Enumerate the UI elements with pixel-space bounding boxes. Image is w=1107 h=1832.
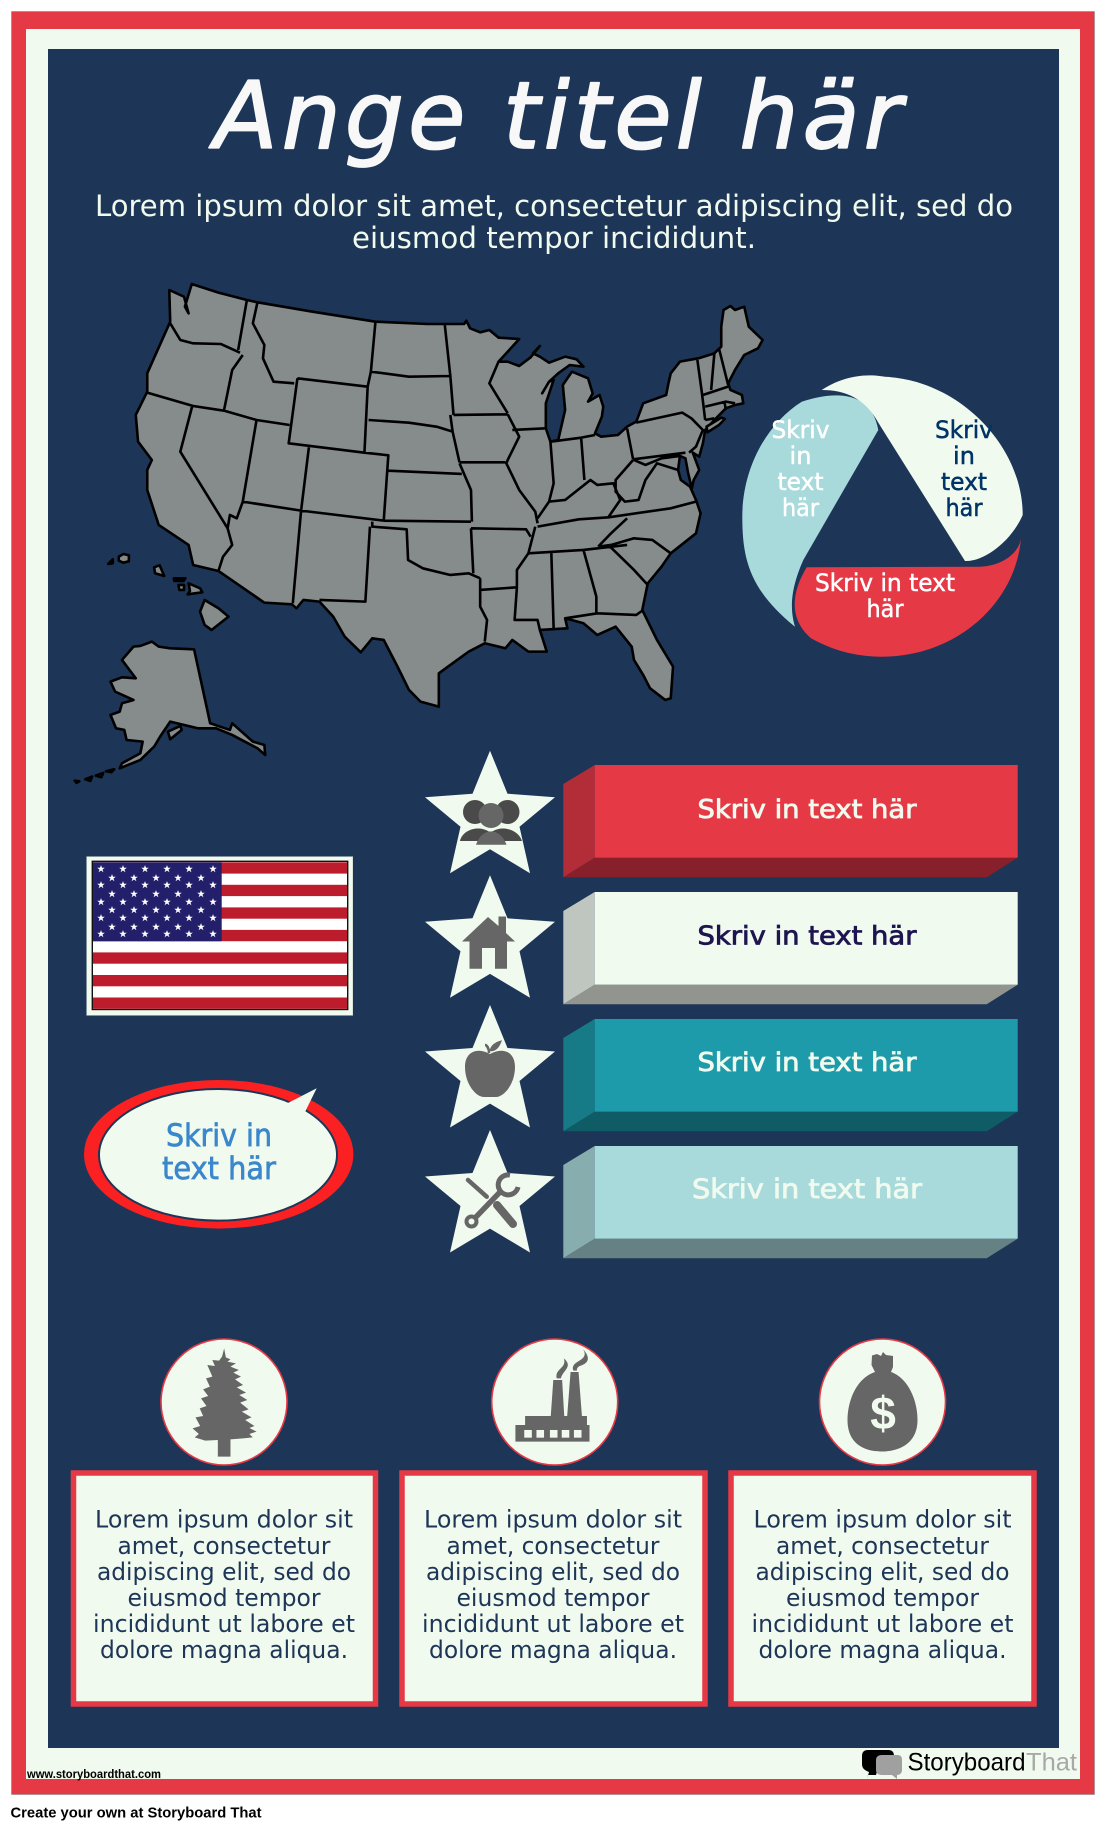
text box 1: adipiscing elit, sed do	[97, 1558, 351, 1586]
pie segment: red	[795, 539, 1021, 657]
pie label: aqua: här	[782, 494, 819, 522]
circle icon: money bag: $	[870, 1387, 896, 1439]
text box 1: amet, consectetur	[118, 1532, 331, 1560]
text box 1: incididunt ut labore et	[93, 1610, 355, 1638]
speech bubble	[84, 1080, 353, 1229]
pie label: red: Skriv in text	[815, 569, 955, 597]
bubble text: text här	[162, 1151, 276, 1187]
pie label: aqua: in	[790, 442, 811, 470]
subtitle	[95, 189, 1013, 255]
pie label: light	[935, 416, 993, 522]
bar 3: teal	[563, 1019, 1018, 1131]
map: Long Island	[707, 418, 725, 432]
text box 3: dolore magna aliqua.	[758, 1636, 1006, 1664]
text box 1: Lorem ipsum dolor sit	[95, 1506, 353, 1534]
subtitle: Lorem ipsum dolor sit amet, consectetur adipiscing elit, sed do	[95, 189, 1013, 223]
text box 2: dolore magna aliqua.	[429, 1636, 677, 1664]
bubble text: Skriv in	[166, 1118, 272, 1154]
storyboard that logo: Storyboard	[908, 1748, 1026, 1776]
text box 2: eiusmod tempor	[456, 1584, 650, 1612]
map: United States	[75, 284, 763, 783]
text box 2	[402, 1473, 705, 1704]
circle icon: factory	[492, 1339, 618, 1465]
star icon: apple	[425, 1005, 555, 1128]
map: Kodiak island	[168, 726, 182, 739]
subtitle: eiusmod tempor incididunt.	[352, 221, 756, 255]
map: state borders	[146, 300, 735, 642]
footer credit: Create your own at Storyboard That	[10, 1804, 262, 1822]
title: Ange titel här	[209, 62, 908, 170]
pie label: light: text	[941, 468, 987, 496]
text box 2: amet, consectetur	[446, 1532, 660, 1560]
bar 2: light	[563, 892, 1018, 1004]
star icon: tools	[425, 1130, 555, 1252]
pie segment: aqua	[742, 395, 878, 627]
text box 2: incididunt ut labore et	[422, 1610, 684, 1638]
pie label: red	[815, 569, 955, 623]
star icon: house	[425, 875, 555, 998]
star icon: people	[425, 751, 555, 873]
text box 3: adipiscing elit, sed do	[756, 1558, 1010, 1586]
text box 3: Lorem ipsum dolor sit	[754, 1506, 1012, 1534]
text box 2: adipiscing elit, sed do	[426, 1558, 680, 1586]
pie label: aqua: text	[778, 468, 824, 496]
pie chart: three-part cycle	[742, 375, 1023, 657]
pie label: red: här	[866, 595, 904, 623]
pie segment: light	[822, 375, 1023, 561]
text box 1: eiusmod tempor	[128, 1584, 321, 1612]
bar 2: light: Skriv in text här	[698, 922, 917, 952]
pie label: light: Skriv	[935, 416, 993, 444]
bar 4: aqua	[563, 1146, 1018, 1258]
text box 1	[74, 1473, 376, 1704]
storyboard that logo	[862, 1748, 1077, 1779]
footer url: www.storyboardthat.com	[26, 1769, 161, 1781]
map: Alaska	[111, 642, 265, 768]
storyboard that logo: That	[1026, 1748, 1077, 1776]
map: contiguous states outline	[136, 284, 763, 707]
bar 4: aqua: Skriv in text här	[692, 1174, 923, 1205]
american flag	[87, 857, 353, 1015]
map: Hawaii	[108, 554, 229, 630]
text box 2: Lorem ipsum dolor sit	[424, 1506, 682, 1534]
text box 1: dolore magna aliqua.	[100, 1636, 348, 1664]
map: Aleutian islands	[75, 769, 114, 783]
bar 3: teal: Skriv in text här	[698, 1048, 917, 1078]
circle icon: money bag	[820, 1339, 946, 1465]
circle icon: tree	[161, 1339, 287, 1465]
text box 3: incididunt ut labore et	[752, 1610, 1014, 1638]
pie label: aqua: Skriv	[772, 416, 830, 444]
pie label: light: här	[946, 494, 983, 522]
bubble text	[162, 1118, 276, 1187]
pie label: light: in	[953, 442, 975, 470]
pie label: aqua	[772, 416, 830, 522]
bar 1: red	[563, 765, 1018, 877]
text box 3: amet, consectetur	[776, 1532, 989, 1560]
text box 3	[731, 1473, 1034, 1704]
text box 3: eiusmod tempor	[786, 1584, 979, 1612]
bar 1: red: Skriv in text här	[698, 795, 917, 825]
flag stars	[97, 865, 217, 937]
